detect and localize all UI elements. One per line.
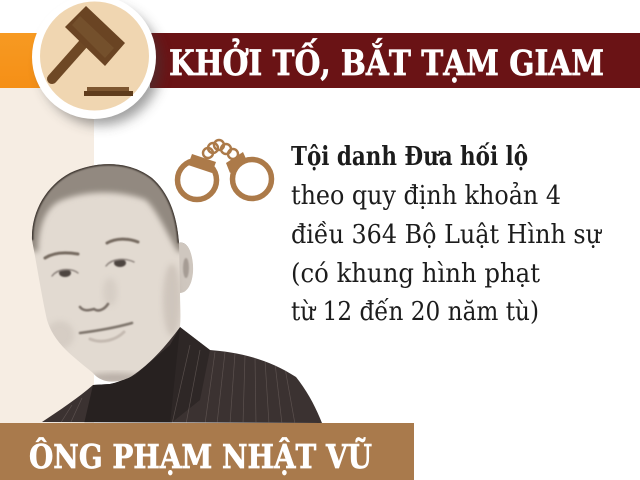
orange header bar — [0, 33, 60, 88]
portrait: Phạm Nhật Vũ — [32, 164, 322, 423]
charge heading: Tội danh Đưa hối lộ — [291, 141, 528, 172]
title banner — [150, 33, 640, 88]
penalty line 2: từ 12 đến 20 năm tù) — [291, 297, 539, 327]
name banner — [0, 423, 414, 480]
suit — [42, 327, 322, 423]
penalty line 1: (có khung hình phạt — [291, 259, 541, 289]
icon: handcuffs — [178, 140, 272, 200]
facial features — [45, 239, 138, 341]
head — [32, 164, 194, 382]
cream side panel — [0, 88, 94, 423]
body text — [291, 141, 602, 327]
icon: gavel badge — [32, 0, 161, 125]
legal basis line 1: theo quy định khoản 4 — [291, 181, 561, 211]
legal basis line 2: điều 364 Bộ Luật Hình sự — [291, 220, 602, 250]
name: ÔNG PHẠM NHẬT VŨ — [29, 436, 372, 476]
